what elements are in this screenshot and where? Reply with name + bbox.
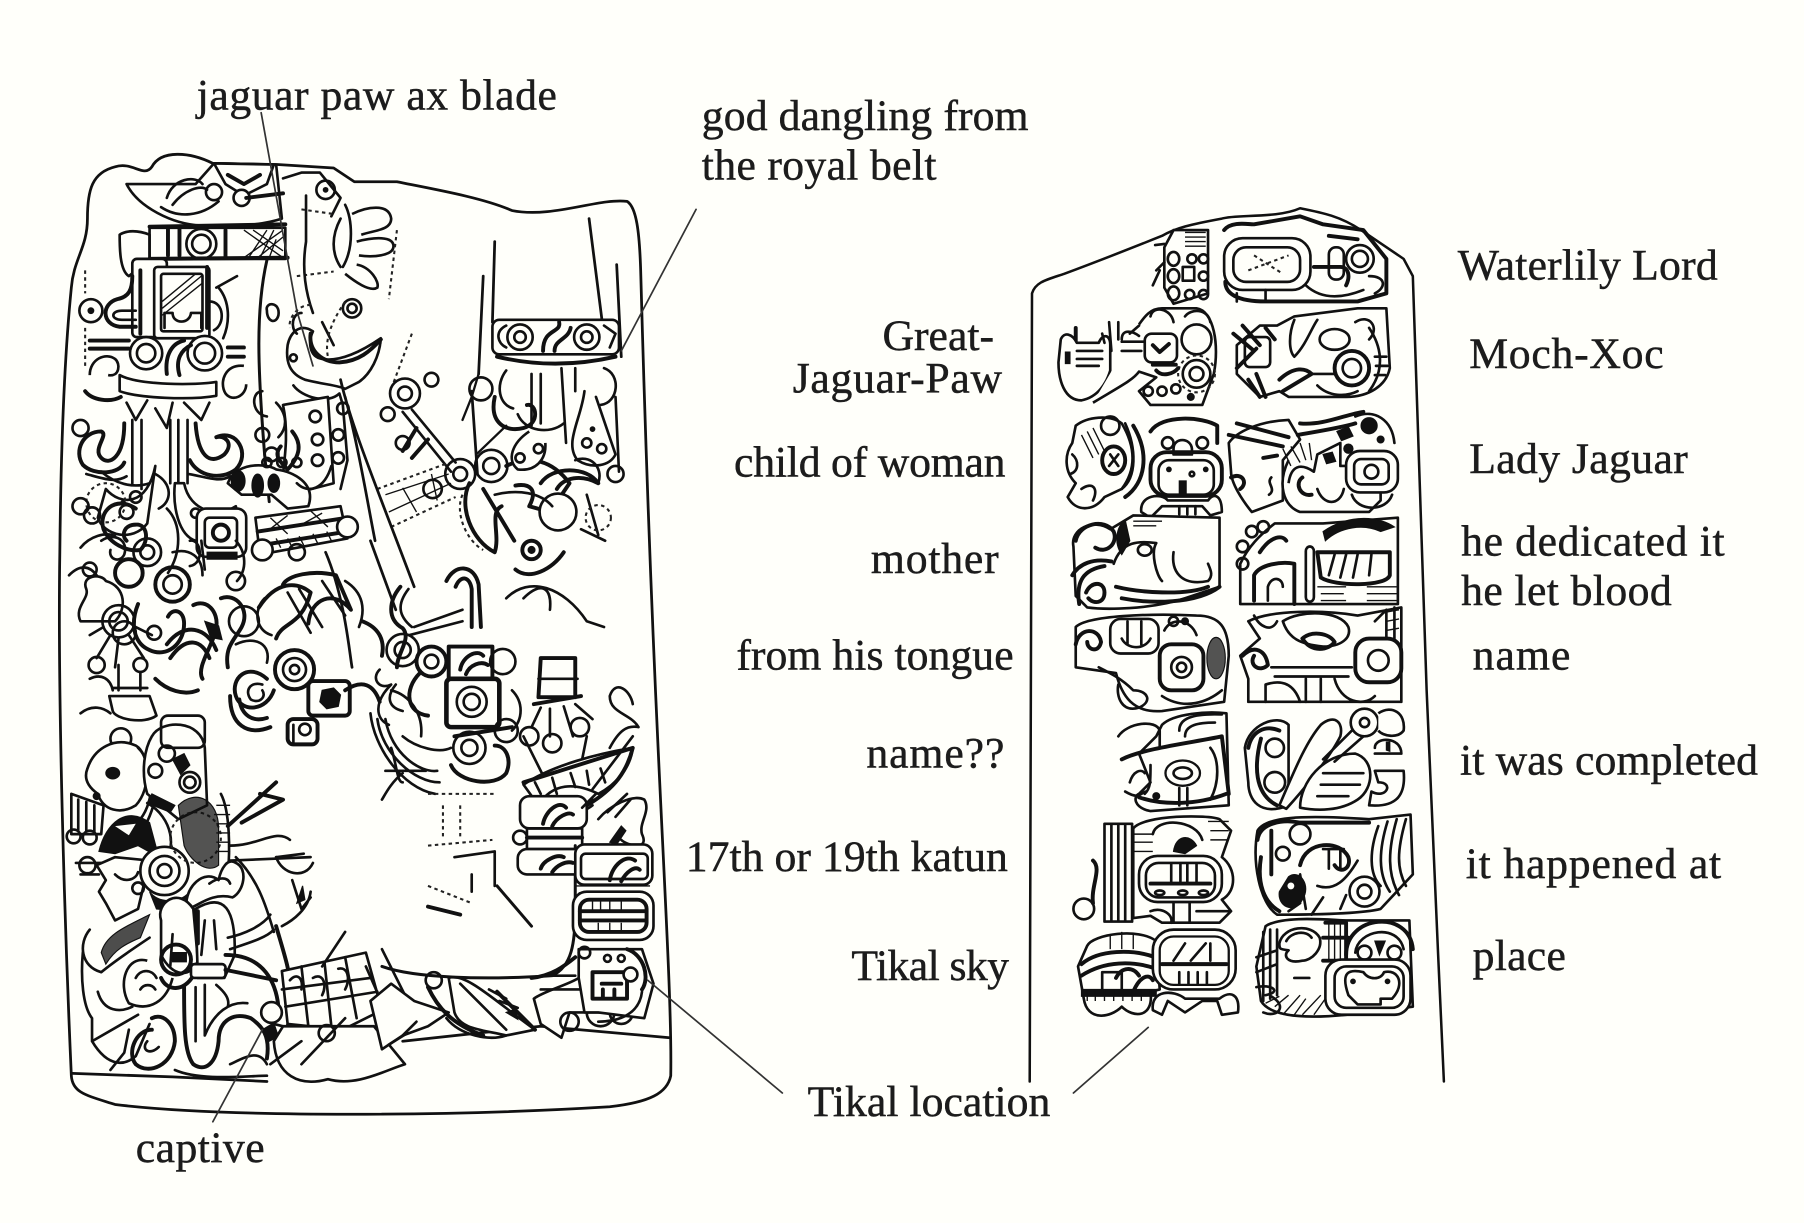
belt band: [120, 224, 288, 276]
label: name: name: [1473, 632, 1570, 680]
panel: carved stela with ruler and captive: [59, 154, 671, 1114]
lower glyph and location tag: [579, 947, 653, 1022]
scroll row: [85, 336, 246, 428]
god dangling from belt: [463, 320, 624, 489]
glyph A1: [1153, 230, 1208, 304]
label: Waterlily Lord: Waterlily Lord: [1458, 242, 1718, 290]
glyph B1: [1224, 216, 1386, 301]
label: Lady Jaguar: Lady Jaguar: [1469, 435, 1688, 483]
glyph A3: [1067, 416, 1144, 508]
woven knee grid: [274, 953, 382, 1047]
branch lines: [228, 782, 311, 861]
right glyph column: [573, 794, 653, 940]
sandal foot: [426, 972, 535, 1038]
staff bar: [381, 373, 456, 472]
label: god dangling from the royal belt: [702, 92, 1029, 189]
hand and fingers: [297, 196, 412, 389]
captive arm and hand knot: [124, 861, 292, 1041]
knotted bar stack: [513, 736, 633, 874]
loincloth band: [252, 506, 358, 560]
right tassels: [520, 658, 639, 782]
glyph A5: [1076, 615, 1229, 711]
label: god dangling from the royal belt: god dangling from: [702, 92, 1029, 140]
glyph A6: [1118, 713, 1229, 811]
leader lines: [213, 113, 1148, 1122]
glyph B8: [1256, 919, 1413, 1017]
extra carved scrolls: [69, 288, 564, 750]
glyph B3: [1229, 412, 1398, 512]
figure inner leg outline: [382, 846, 575, 978]
label: from his tongue: from his tongue: [736, 632, 1014, 680]
left scroll mass: [79, 504, 245, 679]
glyph B5: [1240, 607, 1401, 702]
glyph A8: [1078, 930, 1238, 1016]
captive headdress mask: [67, 716, 207, 844]
label: mother: mother: [871, 535, 999, 583]
hatched feather panel: [178, 794, 230, 874]
glyph A7: [1073, 816, 1233, 923]
label: it happened at: it happened at: [1466, 840, 1721, 888]
label: captive: captive: [136, 1124, 265, 1172]
glyph B2: [1233, 308, 1390, 397]
captive profile face: [76, 847, 189, 920]
icon: jaguar paw ax blade: [267, 301, 381, 389]
panel: hieroglyphic stela text: [1030, 208, 1444, 1081]
glyph B6: [1245, 709, 1404, 810]
skirt details: [270, 748, 495, 1064]
cartouche on waist: [197, 509, 246, 559]
stela outline: [1030, 208, 1444, 1081]
label: child of woman: child of woman: [734, 438, 1006, 486]
knee and calf: [274, 949, 449, 1082]
label: Tikal sky: Tikal sky: [851, 942, 1009, 990]
left central scrolls: [167, 573, 351, 744]
tree and tassel left: [81, 605, 161, 720]
left side scroll and bead: [79, 270, 136, 368]
ruler arm line: [259, 260, 269, 502]
label: 17th or 19th katun: 17th or 19th katun: [686, 833, 1008, 881]
leg contour lines: [326, 219, 621, 667]
ruler scepter column: [254, 385, 349, 497]
lower right ornament: [532, 957, 633, 1038]
head mask right: [445, 450, 611, 627]
base line: [72, 1026, 670, 1081]
captive black headdress: [99, 803, 171, 863]
glyph A4: [1072, 515, 1220, 609]
label: Tikal location: Tikal location: [808, 1078, 1051, 1126]
label: Great-Jaguar-Paw: Great-: [882, 312, 994, 360]
serpent scrolls: [132, 985, 282, 1077]
glyph A3 right part: [1141, 419, 1222, 518]
dark jaguar pelt: [228, 458, 331, 509]
glyph B7: [1256, 815, 1413, 915]
mask panel: [132, 259, 237, 338]
hatched beard: [83, 812, 221, 972]
label: he dedicated it he let blood: [1461, 518, 1725, 615]
captive body: [82, 857, 274, 1070]
glyph A2: [1058, 308, 1216, 405]
label: god dangling from the royal belt: the royal belt: [702, 141, 937, 189]
jaguar maw: [523, 748, 633, 812]
headdress top: [127, 163, 341, 226]
label: place: place: [1473, 932, 1566, 980]
stela outline: [59, 154, 671, 1114]
diagonal cloth band: [377, 464, 456, 527]
central scroll and cartouche: [370, 568, 518, 794]
label: he dedicated it he let blood: he dedicated it: [1461, 518, 1725, 566]
left tassels: [72, 420, 242, 542]
label: Great-Jaguar-Paw: [793, 312, 1003, 402]
label: he dedicated it he let blood: he let blood: [1461, 567, 1672, 615]
label: it was completed: it was completed: [1460, 736, 1758, 784]
label: Moch-Xoc: Moch-Xoc: [1469, 330, 1664, 378]
label: Great-Jaguar-Paw: Jaguar-Paw: [793, 354, 1003, 402]
label: jaguar paw ax blade: jaguar paw ax blade: [195, 71, 557, 119]
glyph B4: [1237, 518, 1398, 604]
label: name??: name??: [866, 729, 1004, 777]
